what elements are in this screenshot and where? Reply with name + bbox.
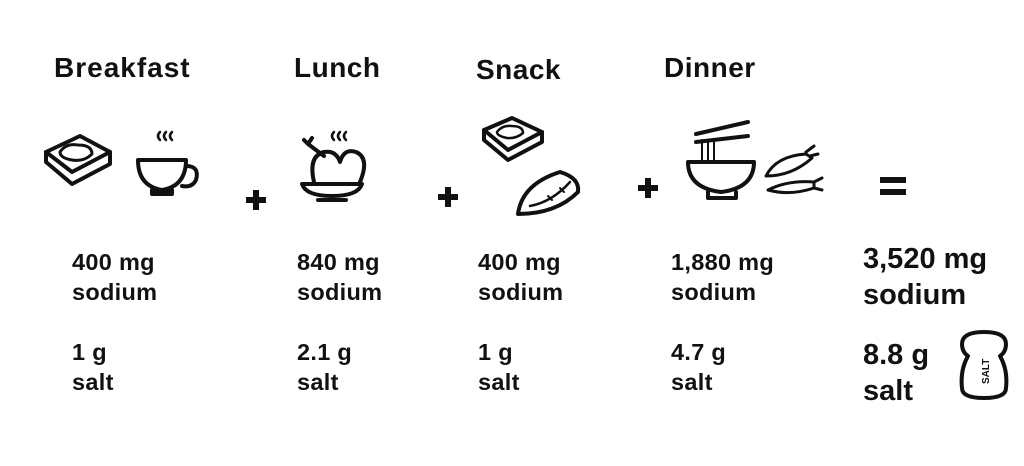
text: totals: [863, 243, 987, 407]
text: totals: salt: [863, 375, 913, 407]
icon: noodle bowl: [688, 122, 754, 198]
heading: Snack: Snack: [476, 54, 561, 85]
icon: carrots: [766, 146, 822, 193]
icon: chicken: [302, 132, 364, 200]
text: dinner values: sodium 4.7 g: [671, 279, 756, 365]
icon: cup: [138, 132, 197, 194]
text: snack values: sodium 1 g: [478, 279, 563, 365]
text: lunch values: salt: [297, 369, 339, 395]
heading: Dinner: Dinner: [664, 52, 756, 83]
text: lunch values: sodium 2.1 g: [297, 279, 382, 365]
text: totals: 3,520 mg: [863, 243, 987, 275]
icon: salt shaker: SALT: [981, 359, 992, 384]
text: lunch values: [297, 249, 382, 395]
text: breakfast values: sodium 1 g: [72, 279, 157, 365]
text: breakfast values: salt: [72, 369, 114, 395]
icon: equals: [880, 180, 906, 192]
icon: toast snack: [484, 118, 542, 160]
text: totals: sodium 8.8 g: [863, 279, 966, 371]
text: snack values: 400 mg: [478, 249, 561, 275]
icon: plus 1: [246, 190, 266, 210]
text: dinner values: 1,880 mg: [671, 249, 774, 275]
icon: plus 3: [638, 178, 658, 198]
icon: toast breakfast: [46, 136, 110, 184]
text: breakfast values: 400 mg: [72, 249, 155, 275]
text: snack values: [478, 249, 563, 395]
text: snack values: salt: [478, 369, 520, 395]
heading: Breakfast: Breakfast: [54, 52, 191, 83]
text: lunch values: 840 mg: [297, 249, 380, 275]
icon: plus 2: [438, 187, 458, 207]
text: dinner values: [671, 249, 774, 395]
icon: salt shaker: [962, 332, 1006, 398]
heading: Lunch: Lunch: [294, 52, 380, 83]
text: dinner values: salt: [671, 369, 713, 395]
text: breakfast values: [72, 249, 157, 395]
icon: orange slice: [518, 172, 578, 214]
